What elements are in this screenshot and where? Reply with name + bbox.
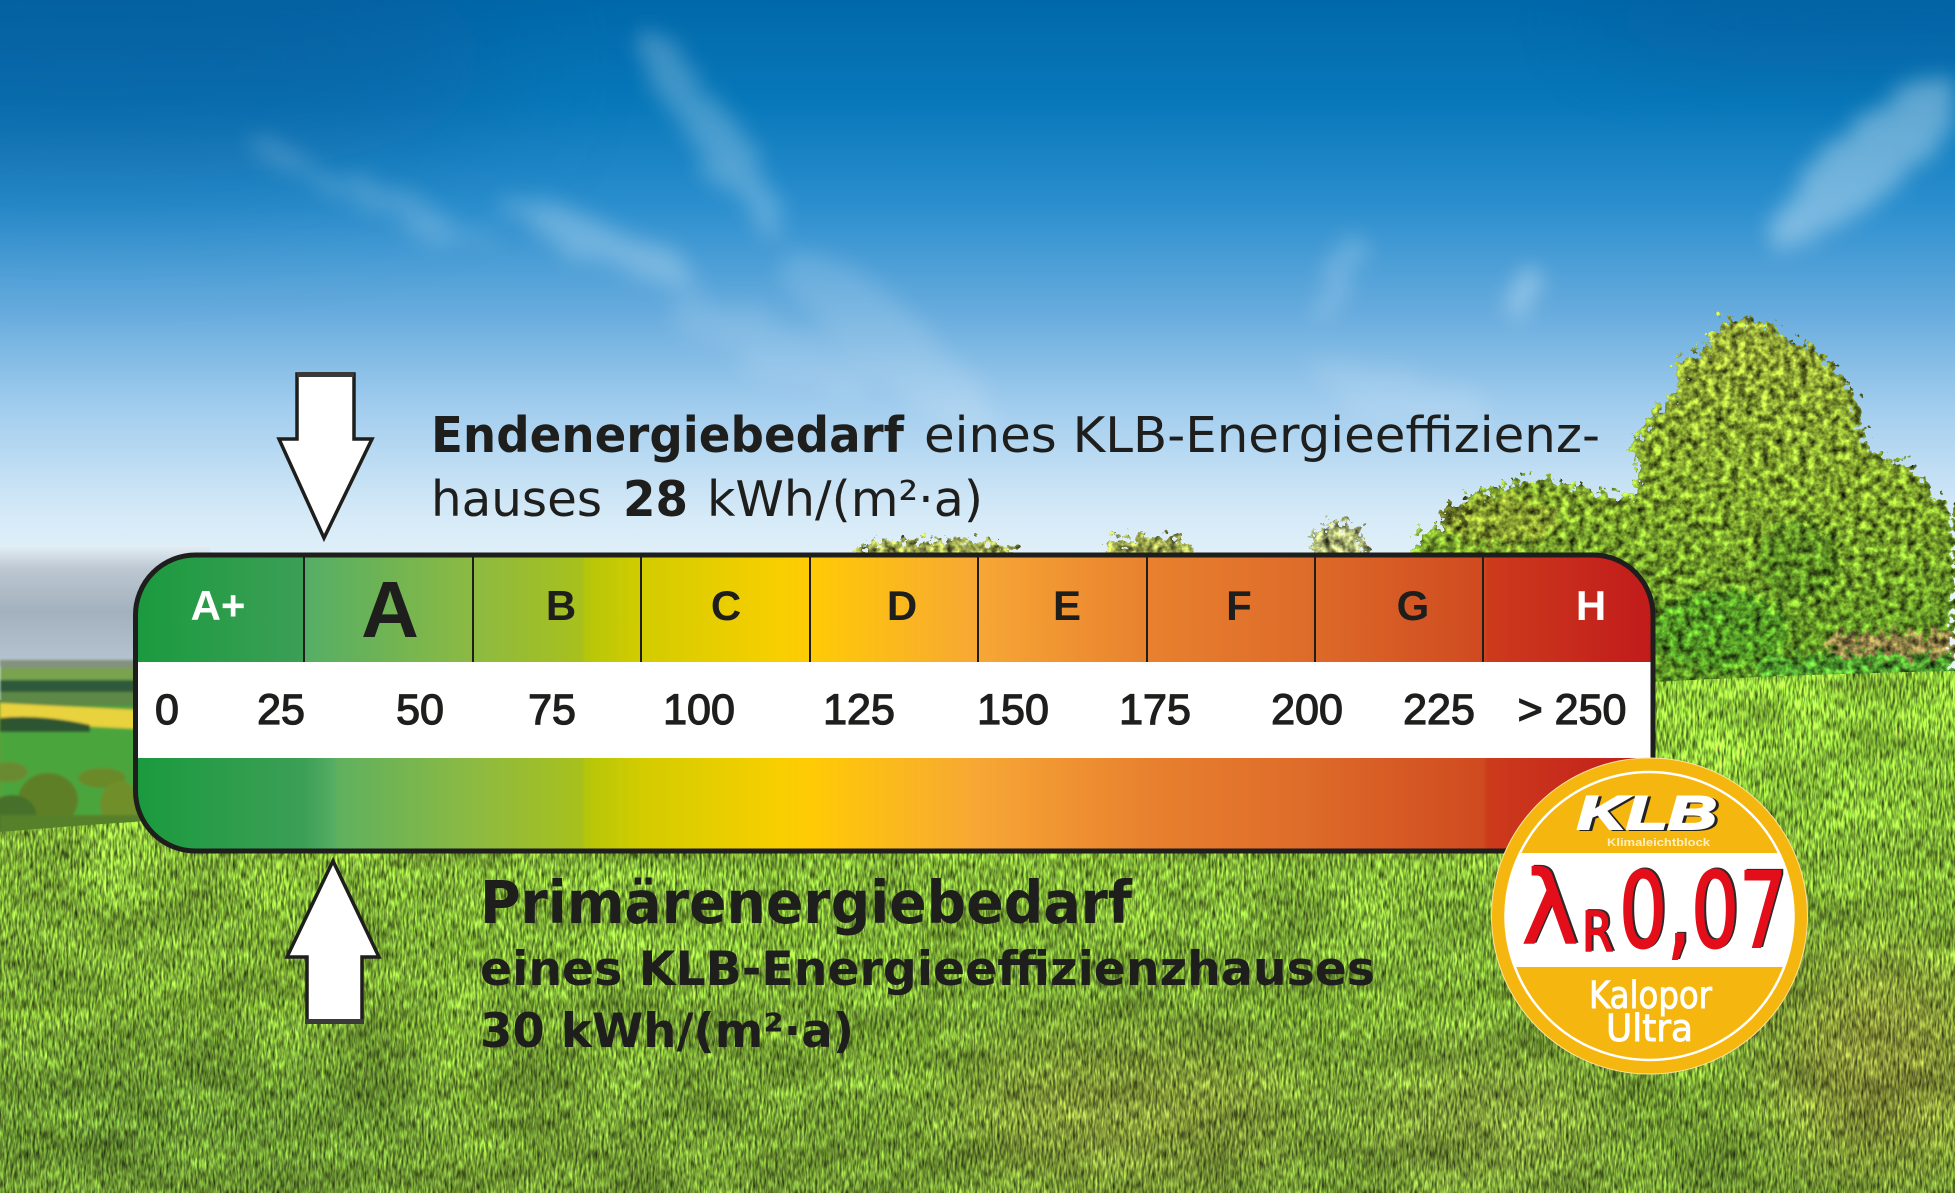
scale values: 225 [1403, 686, 1475, 734]
lambda value: 0,07 [1619, 850, 1787, 972]
background: distant hazy sky at the left horizon [0, 545, 210, 666]
scale values: 200 [1271, 686, 1343, 734]
badge white band [1506, 853, 1792, 967]
badge disc [1492, 758, 1808, 1074]
scale values: 125 [823, 686, 895, 734]
product name: Ultra [1606, 1007, 1693, 1050]
badge: KLB Kalopor Ultra lambda 0,07 [1490, 758, 1810, 1074]
scale values: 0 [155, 686, 179, 734]
bar gradient fill [136, 555, 1653, 851]
background: distant fields and hedges [0, 660, 140, 836]
heading: end energy demand: Endenergiebedarf [431, 407, 905, 464]
heading: primary energy demand [480, 868, 1375, 1059]
efficiency class letters: C [711, 582, 741, 629]
product name [1589, 974, 1713, 1050]
efficiency class letters: H [1576, 582, 1606, 629]
efficiency class letters: F [1226, 582, 1252, 629]
efficiency class letters: A [361, 565, 419, 654]
KLB logo: KLB [1577, 786, 1717, 839]
lambda value: R [1582, 901, 1613, 964]
heading: primary energy demand: 30 kWh/(m²·a) [480, 1004, 854, 1059]
white value band [136, 662, 1653, 758]
scale values: > 250 [1518, 686, 1626, 734]
lower band shifted green segment [304, 758, 336, 849]
class dividers [304, 555, 1483, 662]
heading: primary energy demand: Primärenergiebedarf [480, 868, 1133, 937]
heading: end energy demand: 28 [623, 471, 688, 528]
background: grass meadow [0, 660, 1955, 1193]
product name: Kalopor [1589, 974, 1713, 1017]
heading: end energy demand: kWh/(m²·a) [707, 471, 983, 528]
lambda value [1522, 850, 1787, 972]
background: tree group, dry brush and hedges on the horizon [855, 320, 1955, 690]
scale values: 175 [1119, 686, 1191, 734]
heading: end energy demand: hauses [431, 471, 602, 528]
scale values: 150 [977, 686, 1049, 734]
scale values: 100 [663, 686, 735, 734]
scale values: 75 [528, 686, 576, 734]
energy scale bar [136, 555, 1653, 851]
efficiency class letters: G [1397, 582, 1429, 629]
heading: primary energy demand: eines KLB-Energieeffizienzhauses [480, 942, 1375, 997]
scale values: 50 [396, 686, 444, 734]
scale values [155, 686, 1626, 734]
arrow: down to end energy value [279, 372, 372, 538]
bar outline [136, 555, 1653, 851]
efficiency class letters: A+ [191, 582, 245, 629]
badge inner ring [1506, 772, 1794, 1060]
arrow: up to primary energy value [287, 861, 379, 1024]
heading: end energy demand [431, 407, 1600, 528]
efficiency class letters: B [546, 582, 576, 629]
background: sky with thin clouds [0, 0, 1955, 700]
scale values: 25 [257, 686, 305, 734]
heading: end energy demand: eines KLB-Energieeffizienz- [924, 407, 1600, 464]
efficiency class letters: E [1053, 582, 1081, 629]
Klimaleichtblock tagline: Klimaleichtblock [1607, 837, 1711, 849]
lambda value: λ [1522, 850, 1578, 967]
efficiency class letters: D [887, 582, 917, 629]
efficiency class letters [191, 565, 1606, 654]
